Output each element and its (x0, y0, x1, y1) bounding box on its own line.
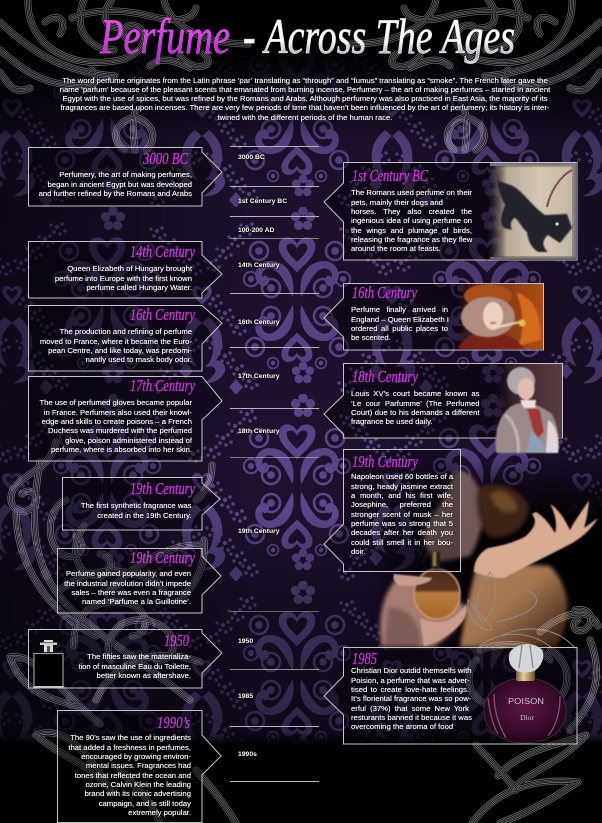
panel: 1990s: 1990’s (157, 713, 190, 732)
intro text: Egypt with the use of spices, but was refined by the Romans and Arabs. Although perfumery was also practiced in East Asia, the majority of its (62, 94, 548, 103)
panel: 17th Century: perfume, where is absorbed into her skin. (51, 445, 192, 454)
panel: 1st Century BC: pets, mainly their dogs and (351, 198, 443, 207)
panel: 16th Century England (323, 283, 544, 350)
panel: 19th Century Napoleon: strong, heady jasmine extract (351, 482, 453, 491)
panel: 19th Century guillotine: 19th Century (130, 548, 195, 567)
timeline: dates and rules: 3000 BC (238, 154, 265, 161)
panel: 19th Century Napoleon: perfume was so strong that 5 (351, 519, 453, 528)
panel: 3000 BC: Perfumery, the art of making perfumes, (59, 170, 192, 179)
timeline: dates and rules: 100-200 AD (238, 227, 274, 234)
panel: 19th Century Napoleon: Napoleon used 60 bottles of a (351, 472, 453, 481)
panel: 14th Century: Queen Elizabeth of Hungary brought (67, 264, 192, 273)
panel: 3000 BC (28, 147, 223, 206)
panel: 19th Century Napoleon: 19th Century (352, 452, 418, 471)
panel: 19th Century Napoleon (323, 449, 461, 572)
panel: 16th Century England: 16th Century (352, 283, 417, 302)
panel: 19th Century guillotine: sales – there was even a fragrance (71, 588, 191, 597)
icon: aftershave bottle (34, 640, 64, 688)
panel: 19th Century synthetic: 19th Century (130, 479, 195, 498)
timeline: dates and rules (230, 146, 319, 782)
photo: Dior Poison bottle: Dior (520, 713, 534, 722)
panel: 1990s: encouraged by growing environ- (81, 752, 191, 761)
timeline: dates and rules: 1950 (238, 638, 253, 645)
panel: 19th Century synthetic: The first synthetic fragrance was (81, 501, 192, 510)
panel: 16th Century France: nantly used to mask body odor. (86, 355, 192, 364)
timeline: dates and rules: 18th Century (238, 428, 280, 435)
panel: 1990s: ozone, Calvin Klein the leading (85, 780, 191, 789)
timeline: dates and rules: 14th Century (238, 262, 280, 269)
panel: 17th Century: glove, poison administered instead of (65, 436, 192, 445)
panel: 17th Century: Duchess was murdered with the perfumed (48, 426, 192, 435)
panel: 1st Century BC: the wings and plumage of birds, (351, 226, 472, 235)
timeline: dates and rules: 16th Century (238, 319, 280, 326)
panel: 1985: tised to create love-hate feelings. (351, 685, 469, 694)
panel: 1950: 1950 (164, 631, 189, 650)
photo: Dior Poison bottle (484, 644, 566, 743)
panel: 16th Century France: The production and refining of perfume (60, 327, 192, 336)
timeline: dates and rules: 1st Century BC (238, 198, 287, 205)
photo: woman holding perfume bottle (370, 460, 602, 648)
panel: 18th Century: Louis XV’s court became known as (351, 389, 480, 398)
panel: 18th Century (323, 363, 563, 454)
title: Perfume (99, 8, 230, 64)
panel: 1985: erful (37%) that some New York (351, 704, 469, 713)
panel: 19th Century Napoleon: decades after her death you (351, 528, 453, 537)
panel: 16th Century France: moved to France, where it became the Euro- (40, 337, 192, 346)
panel: 1950: The fifties saw the materializa- (87, 652, 191, 661)
panel: 1st Century BC: 1st Century BC (352, 166, 428, 185)
timeline: dates and rules: 19th Century (238, 528, 280, 535)
intro text: name ‘parfum’ because of the pleasant scents that emanated from burning incense. Perfumery – the art of making perfumes – started in ancient (60, 85, 550, 94)
photo: Louis XV portrait (493, 364, 562, 453)
photo: Queen Elizabeth I (456, 284, 543, 349)
panel: 1990s: mental issues. Fragrances had (86, 761, 191, 770)
panel: 1985: 1985 (352, 649, 377, 668)
title (99, 8, 515, 64)
panel: 19th Century Napoleon: stronger scent of musk – her (351, 510, 453, 519)
panel: 1985: Christian Dior outdid themselfs with (351, 666, 472, 675)
panel: 18th Century: fragrance be used daily. (351, 417, 432, 426)
panel: 1st Century BC: The Romans used perfume on their (351, 188, 472, 197)
panel: 1st Century BC (323, 162, 578, 260)
panel: 1985: overcoming the aroma of food (351, 722, 453, 731)
panel: 14th Century: 14th Century (130, 242, 195, 261)
intro text: twined with the different periods of the human race. (218, 112, 392, 122)
panel: 1950: tion of masculine Eau du Toilette, (78, 662, 191, 671)
panel: 16th Century England: England – Queen Elizabeth I (351, 315, 449, 324)
panel: 18th Century: Court) due to his demands a different (351, 408, 480, 417)
panel: 16th Century England: Perfume finally arrived in (351, 305, 448, 314)
panel: 1990s: tones that reflected the ocean and (75, 771, 191, 780)
panel: 3000 BC: and further refined by the Romans and Arabs (39, 189, 192, 198)
panel: 17th Century (28, 376, 223, 462)
panel: 16th Century England: ordered all public places to (351, 324, 448, 333)
intro text (60, 76, 550, 122)
intro text: The word perfume originates from the Latin phrase ‘par’ translating as “through” and “fumus” translating as “smoke”. The French later gave the (62, 76, 548, 84)
timeline: dates and rules: 17th Century (238, 373, 280, 380)
panel: 1990s (57, 710, 222, 823)
panel: 3000 BC: 3000 BC (142, 149, 188, 168)
panel: 17th Century: The use of perfumed gloves became popular (39, 398, 192, 407)
panel: 1990s: extremely popular. (128, 808, 191, 817)
panel: 1985 (323, 644, 578, 744)
panel: 1990s: brand with its iconic advertising (85, 789, 191, 798)
panel: 19th Century Napoleon: a month, and his first wife, (351, 491, 453, 500)
panel: 1990s: The 90’s saw the use of ingredients (70, 733, 191, 742)
panel: 19th Century Napoleon: could still smell it in her bou- (351, 538, 453, 547)
panel: 19th Century guillotine: named ‘Parfume a la Guillotine’. (82, 597, 191, 606)
panel: 1985: resturants banned it because it was (351, 713, 472, 722)
panel: 19th Century Napoleon: Josephine, preferred the (351, 500, 453, 509)
panel: 1985: It’s floriental fragrance was so pow- (351, 694, 471, 703)
timeline: dates and rules: 1985 (238, 693, 253, 700)
panel: 1st Century BC: ingenious idea of using perfume on (351, 216, 472, 225)
panel: 14th Century: perfume into Europe with the first known (55, 274, 192, 283)
panel: 18th Century: ‘Le cour Parfumme’ (The Perfumed (351, 399, 480, 408)
intro text: fragrances are based upon incenses. There are very few periods of time that haven’t been influenced by the art of perfumery; its history is inter- (61, 103, 549, 112)
panel: 16th Century France: 16th Century (130, 305, 195, 324)
panel: 1st Century BC: horses. They also created the (351, 207, 472, 216)
panel: 1st Century BC: releasing the fragrance as they flew (351, 235, 472, 244)
panel: 3000 BC: began in ancient Egypt but was developed (48, 180, 192, 189)
panel: 1985: Poision, a perfume that was adver- (351, 676, 470, 685)
panel: 14th Century: perfume called Hungary Water. (86, 283, 192, 292)
panel: 18th Century: 18th Century (352, 367, 418, 386)
photo: Dior Poison bottle: POISON (508, 696, 544, 706)
panel: 19th Century guillotine: Perfume gained popularity, and even (66, 569, 191, 578)
panel: 1st Century BC: around the room at feasts. (351, 244, 441, 253)
panel: 19th Century guillotine (57, 548, 222, 614)
panel: 17th Century: 17th Century (130, 376, 195, 395)
photo: Roman dog mosaic (488, 163, 576, 260)
panel: 16th Century France (28, 305, 223, 372)
panel: 1950 (28, 629, 223, 688)
panel: 19th Century synthetic (62, 477, 221, 530)
panel: 17th Century: edge and skills to create poisons – a French (42, 417, 192, 426)
timeline: dates and rules: 1990s (238, 751, 257, 758)
panel: 19th Century Napoleon: doir. (351, 547, 366, 556)
panel: 19th Century synthetic: created in the 19th Century. (97, 511, 192, 520)
panel: 17th Century: in France. Perfumers also used their knowl- (44, 408, 192, 417)
panel: 19th Century guillotine: the industrial revolution didn’t impede (64, 579, 191, 588)
panel: 1990s: campaign, and is still today (99, 799, 191, 808)
panel: 1990s: that added a freshness in perfumes, (68, 743, 191, 752)
panel: 16th Century France: pean Centre, and like today, was predomi- (48, 346, 192, 355)
panel: 1950: better known as aftershave. (97, 671, 191, 680)
panel: 16th Century England: be scented. (351, 333, 391, 342)
panel: 14th Century (28, 241, 223, 298)
